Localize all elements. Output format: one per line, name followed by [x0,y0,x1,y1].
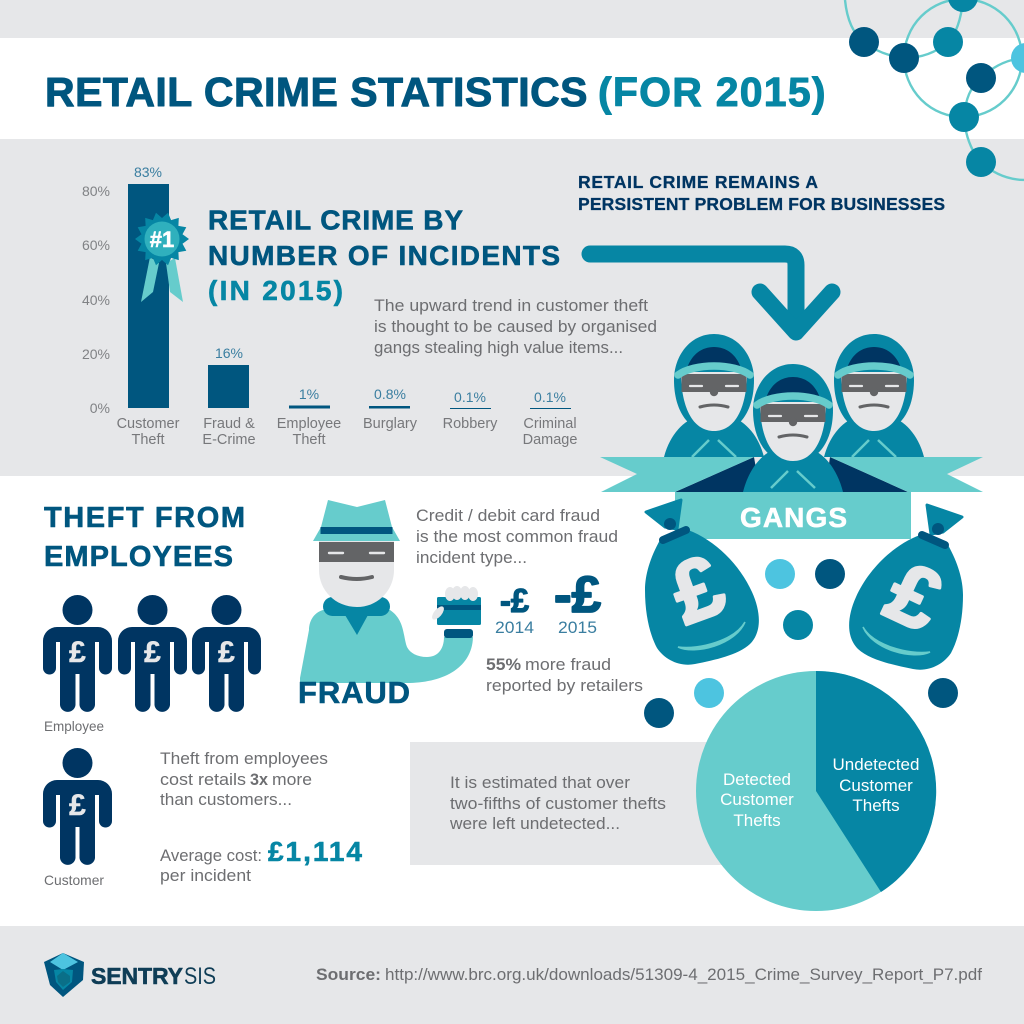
head [319,541,394,607]
bar values: 0.8% [374,386,406,402]
category labels: Criminal [523,416,577,432]
pie chart: detected vs undetected: Customer [720,790,794,809]
text: theft from employees cost: Theft from employees [160,749,328,768]
icon: right money bag: £ [872,543,956,650]
icon: employee figures: £ [69,636,86,669]
title: RETAIL CRIME STATISTICS [45,69,588,115]
decorative dots [644,559,958,728]
text: upward trend: The upward trend in customer theft [374,296,648,315]
bar values: 0.1% [454,389,486,405]
bar values: 16% [215,345,243,361]
category labels: Theft [131,432,165,448]
icon: left money bag [645,500,759,665]
bar values: 0.1% [534,389,566,405]
text: more fraud reported: more fraud [525,655,611,674]
category labels: E-Crime [202,432,256,448]
icon: employee figures: £ [144,636,161,669]
panel: undetected thefts callout: It is estimated that over [450,773,630,792]
pie chart: detected vs undetected [696,671,936,911]
text: card fraud [416,506,618,567]
fraud comparison 2014 vs 2015: -£ [554,566,601,623]
text: upward trend [374,296,657,357]
fraud comparison 2014 vs 2015 [495,566,601,637]
text: more fraud reported: 55% [486,655,521,674]
bar chart: retail crime by number of incidents [82,164,577,448]
heading: theft from employees: THEFT FROM [44,502,245,534]
decorative network of nodes, top right [845,0,1024,180]
text: theft from employees cost: than customers... [160,790,292,809]
y axis labels: 20% [82,346,110,362]
logo: sentrysis: SIS [184,963,216,990]
icon: employee figures: £ [218,636,235,669]
icon: customer figure: Customer [44,872,104,888]
pie chart: detected vs undetected: Thefts [852,796,900,815]
icon: number one rosette: #1 [150,227,174,252]
y axis labels: 80% [82,183,110,199]
text: average cost: per incident [160,866,251,885]
banner fold shadows [675,457,908,492]
category labels: Fraud & [203,416,255,432]
arrow pointing to gangs [590,254,832,332]
category labels: Robbery [443,416,498,432]
category labels: Customer [117,416,180,432]
gangs illustration [600,334,983,539]
panel: undetected thefts callout: two-fifths of customer thefts [450,794,666,813]
source: Source: [316,965,381,984]
y axis labels: 60% [82,237,110,253]
text: upward trend: is thought to be caused by organised [374,317,657,336]
icon: right money bag [849,505,963,670]
title [45,69,826,115]
body [300,610,473,683]
text: more fraud reported: reported by retailers [486,676,643,695]
pie chart: detected vs undetected: Customer [839,776,913,795]
panel: undetected thefts callout: were left undetected... [449,814,620,833]
icon: employee figures: Employee [44,718,104,734]
text: theft from employees cost [160,749,328,809]
heading: retail crime by number of incidents: (IN 2015) [208,275,343,306]
fraud comparison 2014 vs 2015: 2014 [495,618,534,637]
text: more fraud reported [486,655,643,695]
logo: sentrysis [44,953,216,997]
bar values: 1% [299,386,319,402]
fraud comparison 2014 vs 2015: 2015 [558,618,597,637]
heading: theft from employees [44,502,245,573]
panel: undetected thefts callout [410,742,770,865]
heading: persistent problem: RETAIL CRIME REMAINS A [578,172,818,192]
category labels: Theft [292,432,326,448]
heading: theft from employees: EMPLOYEES [44,541,233,573]
heading: persistent problem: PERSISTENT PROBLEM FOR BUSINESSES [578,194,945,214]
bar values: 83% [134,164,162,180]
heading: retail crime by number of incidents: NUMBER OF INCIDENTS [208,240,560,271]
logo: sentrysis: SENTRY [91,963,183,989]
gang member: right [824,334,924,457]
text: upward trend: gangs stealing high value items... [374,338,623,357]
category labels: Burglary [363,416,418,432]
scarf [323,597,390,635]
source: http://www.brc.org.uk/downloads/51309-4_2015_Crime_Survey_Report_P7.pdf [385,965,982,984]
mask [319,542,394,562]
icon: customer figure: £ [69,789,86,822]
icon: fraud character [300,500,481,683]
icon: employee figures [43,595,261,734]
text: theft from employees cost: 3x [250,770,269,789]
pie chart: detected vs undetected: Thefts [733,811,781,830]
category labels [117,416,577,448]
heading: retail crime by number of incidents: RETAIL CRIME BY [208,204,463,236]
text: card fraud: incident type... [416,548,527,567]
text: theft from employees cost: cost retails [160,770,246,789]
text: card fraud: is the most common fraud [416,527,618,546]
icon: customer figure [43,748,112,888]
fraud comparison 2014 vs 2015: -£ [500,582,530,619]
card and hand [444,629,473,638]
y axis labels [82,183,110,416]
text: average cost: Average cost: [160,846,262,865]
text: average cost [160,836,362,885]
title: (FOR 2015) [598,69,826,115]
y axis labels: 0% [90,400,110,416]
pie chart: detected vs undetected: Undetected [833,755,919,774]
banner with gangs label: GANGS [740,502,847,533]
y axis labels: 40% [82,292,110,308]
icon: number one rosette [135,213,189,302]
text: card fraud: Credit / debit card fraud [416,506,600,525]
text: average cost: £1,114 [268,836,362,867]
bar values [134,164,566,405]
bars [128,184,571,409]
gang member: left [664,334,764,457]
heading: fraud: FRAUD [298,675,410,710]
icon: left money bag: £ [659,537,737,643]
text: theft from employees cost: more [272,770,312,789]
banner with gangs label [600,457,983,539]
gang member: middle [743,364,843,492]
category labels: Employee [277,416,341,432]
heading: retail crime by number of incidents [208,204,560,306]
category labels: Damage [523,432,577,448]
hat [313,500,400,541]
heading: persistent problem [578,172,945,214]
pie chart: detected vs undetected: Detected [723,770,791,789]
